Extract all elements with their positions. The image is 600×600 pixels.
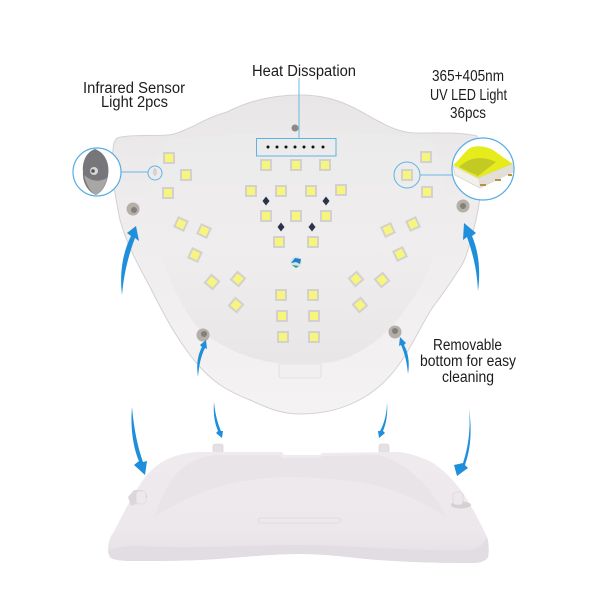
removable bottom label: Removable xyxy=(433,337,502,354)
removable bottom label: bottom for easy xyxy=(420,353,516,370)
UV LED label: 36pcs xyxy=(450,105,486,122)
removable tray xyxy=(108,444,489,563)
arrow: large down left xyxy=(131,407,147,475)
tray finger tab xyxy=(258,518,341,523)
UV LED label xyxy=(430,68,508,122)
UV LED label: UV LED Light xyxy=(430,87,508,104)
infrared sensor label xyxy=(83,80,185,111)
arrow: small down right xyxy=(378,402,387,438)
UV LED label: 365+405nm xyxy=(432,68,504,85)
removable bottom label: cleaning xyxy=(442,369,494,386)
heading: heat dissipation: Heat Disspation xyxy=(252,63,356,80)
removable tab xyxy=(279,364,321,378)
heat dissipation callout xyxy=(256,78,336,156)
lamp body xyxy=(112,95,481,414)
screws xyxy=(126,124,470,342)
infrared sensor callout xyxy=(73,148,162,196)
icon: logo xyxy=(290,256,302,268)
arrow: small up right xyxy=(399,337,409,374)
arrow: large down right xyxy=(454,408,471,476)
tray pegs xyxy=(213,444,389,453)
lamp inner bowl xyxy=(150,132,447,363)
arrow: large up right xyxy=(463,223,479,291)
arrow: large up left xyxy=(121,226,139,295)
arrow: small up left xyxy=(197,340,207,377)
removable bottom label xyxy=(420,337,516,386)
tray posts xyxy=(128,490,471,508)
tray rim shadow xyxy=(108,537,489,563)
infrared sensor label: Light 2pcs xyxy=(101,94,168,111)
diamond markers xyxy=(262,196,330,232)
infrared sensor label: Infrared Sensor xyxy=(83,80,185,97)
arrow: small down left xyxy=(214,402,223,438)
UV LED grid xyxy=(162,151,433,343)
UV LED callout xyxy=(394,138,514,200)
tray crescent recess xyxy=(155,455,447,518)
